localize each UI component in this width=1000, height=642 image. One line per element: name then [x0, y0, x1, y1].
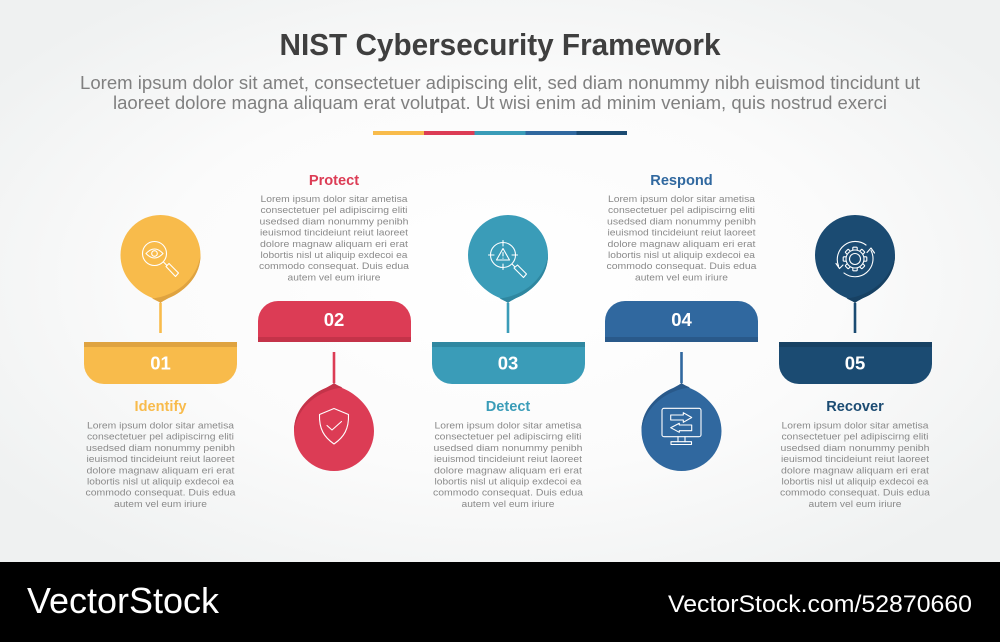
number bar 02: 02 — [324, 309, 344, 330]
description: detect: dolore magnaw aliquam eri erat — [434, 465, 582, 476]
description: detect: lobortis nisl ut aliquip exdecoi ea — [434, 476, 582, 488]
number bar 04 — [605, 301, 758, 342]
icon: shield with check — [319, 408, 349, 444]
description: detect: consectetuer pel adipiscirng eliti — [434, 432, 582, 443]
description: recover: ieuismod tincideiunt reiut laoreet — [781, 454, 929, 465]
icon: magnifier with target and warning — [488, 240, 526, 278]
description: recover: autem vel eum iriure — [808, 499, 902, 510]
description: protect: ieuismod tincideiunt reiut laoreet — [260, 228, 408, 239]
description: identify: dolore magnaw aliquam eri erat — [86, 465, 235, 476]
description: detect: usedsed diam nonummy penibh — [434, 443, 582, 454]
description: recover: Lorem ipsum dolor sitar ametisa — [782, 420, 929, 432]
heading: respond: Respond — [650, 173, 713, 189]
footer url: VectorStock.com/52870660 — [668, 591, 972, 618]
description: recover: dolore magnaw aliquam eri erat — [781, 465, 929, 476]
heading: identify: Identify — [135, 399, 187, 415]
panel: 05 recover — [779, 215, 932, 510]
subtitle — [80, 73, 920, 113]
subtitle: laoreet dolore magna aliquam erat volutpat. Ut wisi enim ad minim veniam, quis nostrud exerci — [113, 93, 887, 113]
description: protect — [259, 194, 410, 283]
pin: respond — [642, 352, 722, 471]
description: protect: autem vel eum iriure — [288, 272, 380, 283]
description: detect: autem vel eum iriure — [462, 499, 554, 510]
description: identify: lobortis nisl ut aliquip exdecoi ea — [87, 476, 235, 488]
description: respond: ieuismod tincideiunt reiut laoreet — [608, 228, 756, 239]
number bar 01 — [84, 342, 237, 384]
number bar 03: 03 — [498, 352, 518, 374]
description: respond: commodo consequat. Duis edua — [606, 261, 757, 272]
subtitle: Lorem ipsum dolor sit amet, consectetuer adipiscing elit, sed diam nonummy nibh euismod tincidunt ut — [80, 73, 920, 93]
description: detect: commodo consequat. Duis edua — [433, 488, 584, 499]
panel: 01 identify — [84, 215, 237, 510]
description: recover: consectetuer pel adipiscirng eliti — [782, 432, 928, 443]
pin: recover — [815, 215, 895, 333]
description: protect: commodo consequat. Duis edua — [259, 261, 410, 272]
description: identify: Lorem ipsum dolor sitar ametisa — [87, 420, 235, 432]
panel: 02 protect — [258, 173, 411, 471]
number bar 05: 05 — [845, 352, 865, 374]
description: respond: dolore magnaw aliquam eri erat — [608, 239, 756, 250]
description: identify: usedsed diam nonummy penibh — [86, 443, 235, 454]
description: respond — [606, 194, 757, 283]
icon: magnifier with eye — [142, 242, 178, 276]
description: identify: ieuismod tincideiunt reiut laoreet — [86, 454, 235, 465]
description: respond: Lorem ipsum dolor sitar ametisa — [608, 194, 756, 205]
colour divider — [373, 131, 627, 135]
description: protect: usedsed diam nonummy penibh — [260, 216, 408, 227]
number bar 05 — [779, 342, 932, 384]
description: detect: Lorem ipsum dolor sitar ametisa — [434, 420, 582, 432]
description: identify: consectetuer pel adipiscirng eliti — [87, 432, 234, 443]
description: identify — [86, 420, 236, 510]
description: respond: usedsed diam nonummy penibh — [607, 216, 756, 227]
description: identify: autem vel eum iriure — [114, 499, 207, 510]
footer band — [0, 562, 1000, 642]
heading: recover: Recover — [826, 399, 884, 415]
icon: monitor with arrows — [662, 408, 701, 444]
description: recover — [780, 420, 931, 510]
description: protect: consectetuer pel adipiscirng eliti — [260, 205, 408, 216]
description: recover: usedsed diam nonummy penibh — [780, 443, 930, 454]
number bar 02 — [258, 301, 411, 342]
description: protect: lobortis nisl ut aliquip exdecoi ea — [260, 250, 408, 261]
pin: protect — [294, 352, 374, 471]
description: detect — [433, 420, 584, 510]
description: recover: commodo consequat. Duis edua — [780, 488, 931, 499]
heading: protect: Protect — [309, 173, 359, 189]
panel: 04 respond — [605, 173, 758, 471]
description: protect: dolore magnaw aliquam eri erat — [260, 239, 408, 250]
description: respond: consectetuer pel adipiscirng eliti — [608, 205, 755, 216]
panel: 03 detect — [432, 215, 585, 510]
description: detect: ieuismod tincideiunt reiut laoreet — [434, 454, 582, 465]
description: respond: lobortis nisl ut aliquip exdecoi ea — [608, 250, 756, 261]
footer logo text: VectorStock — [27, 580, 220, 621]
heading: detect: Detect — [486, 399, 530, 415]
number bar 01: 01 — [150, 352, 171, 374]
icon: gear with circular arrows — [836, 241, 874, 277]
number bar 04: 04 — [671, 309, 692, 330]
pin: identify — [120, 215, 200, 333]
description: identify: commodo consequat. Duis edua — [86, 488, 236, 499]
description: protect: Lorem ipsum dolor sitar ametisa — [260, 194, 408, 205]
description: respond: autem vel eum iriure — [635, 272, 728, 283]
title: NIST Cybersecurity Framework — [280, 27, 721, 62]
description: recover: lobortis nisl ut aliquip exdecoi ea — [782, 476, 929, 488]
pin: detect — [468, 215, 548, 333]
number bar 03 — [432, 342, 585, 384]
